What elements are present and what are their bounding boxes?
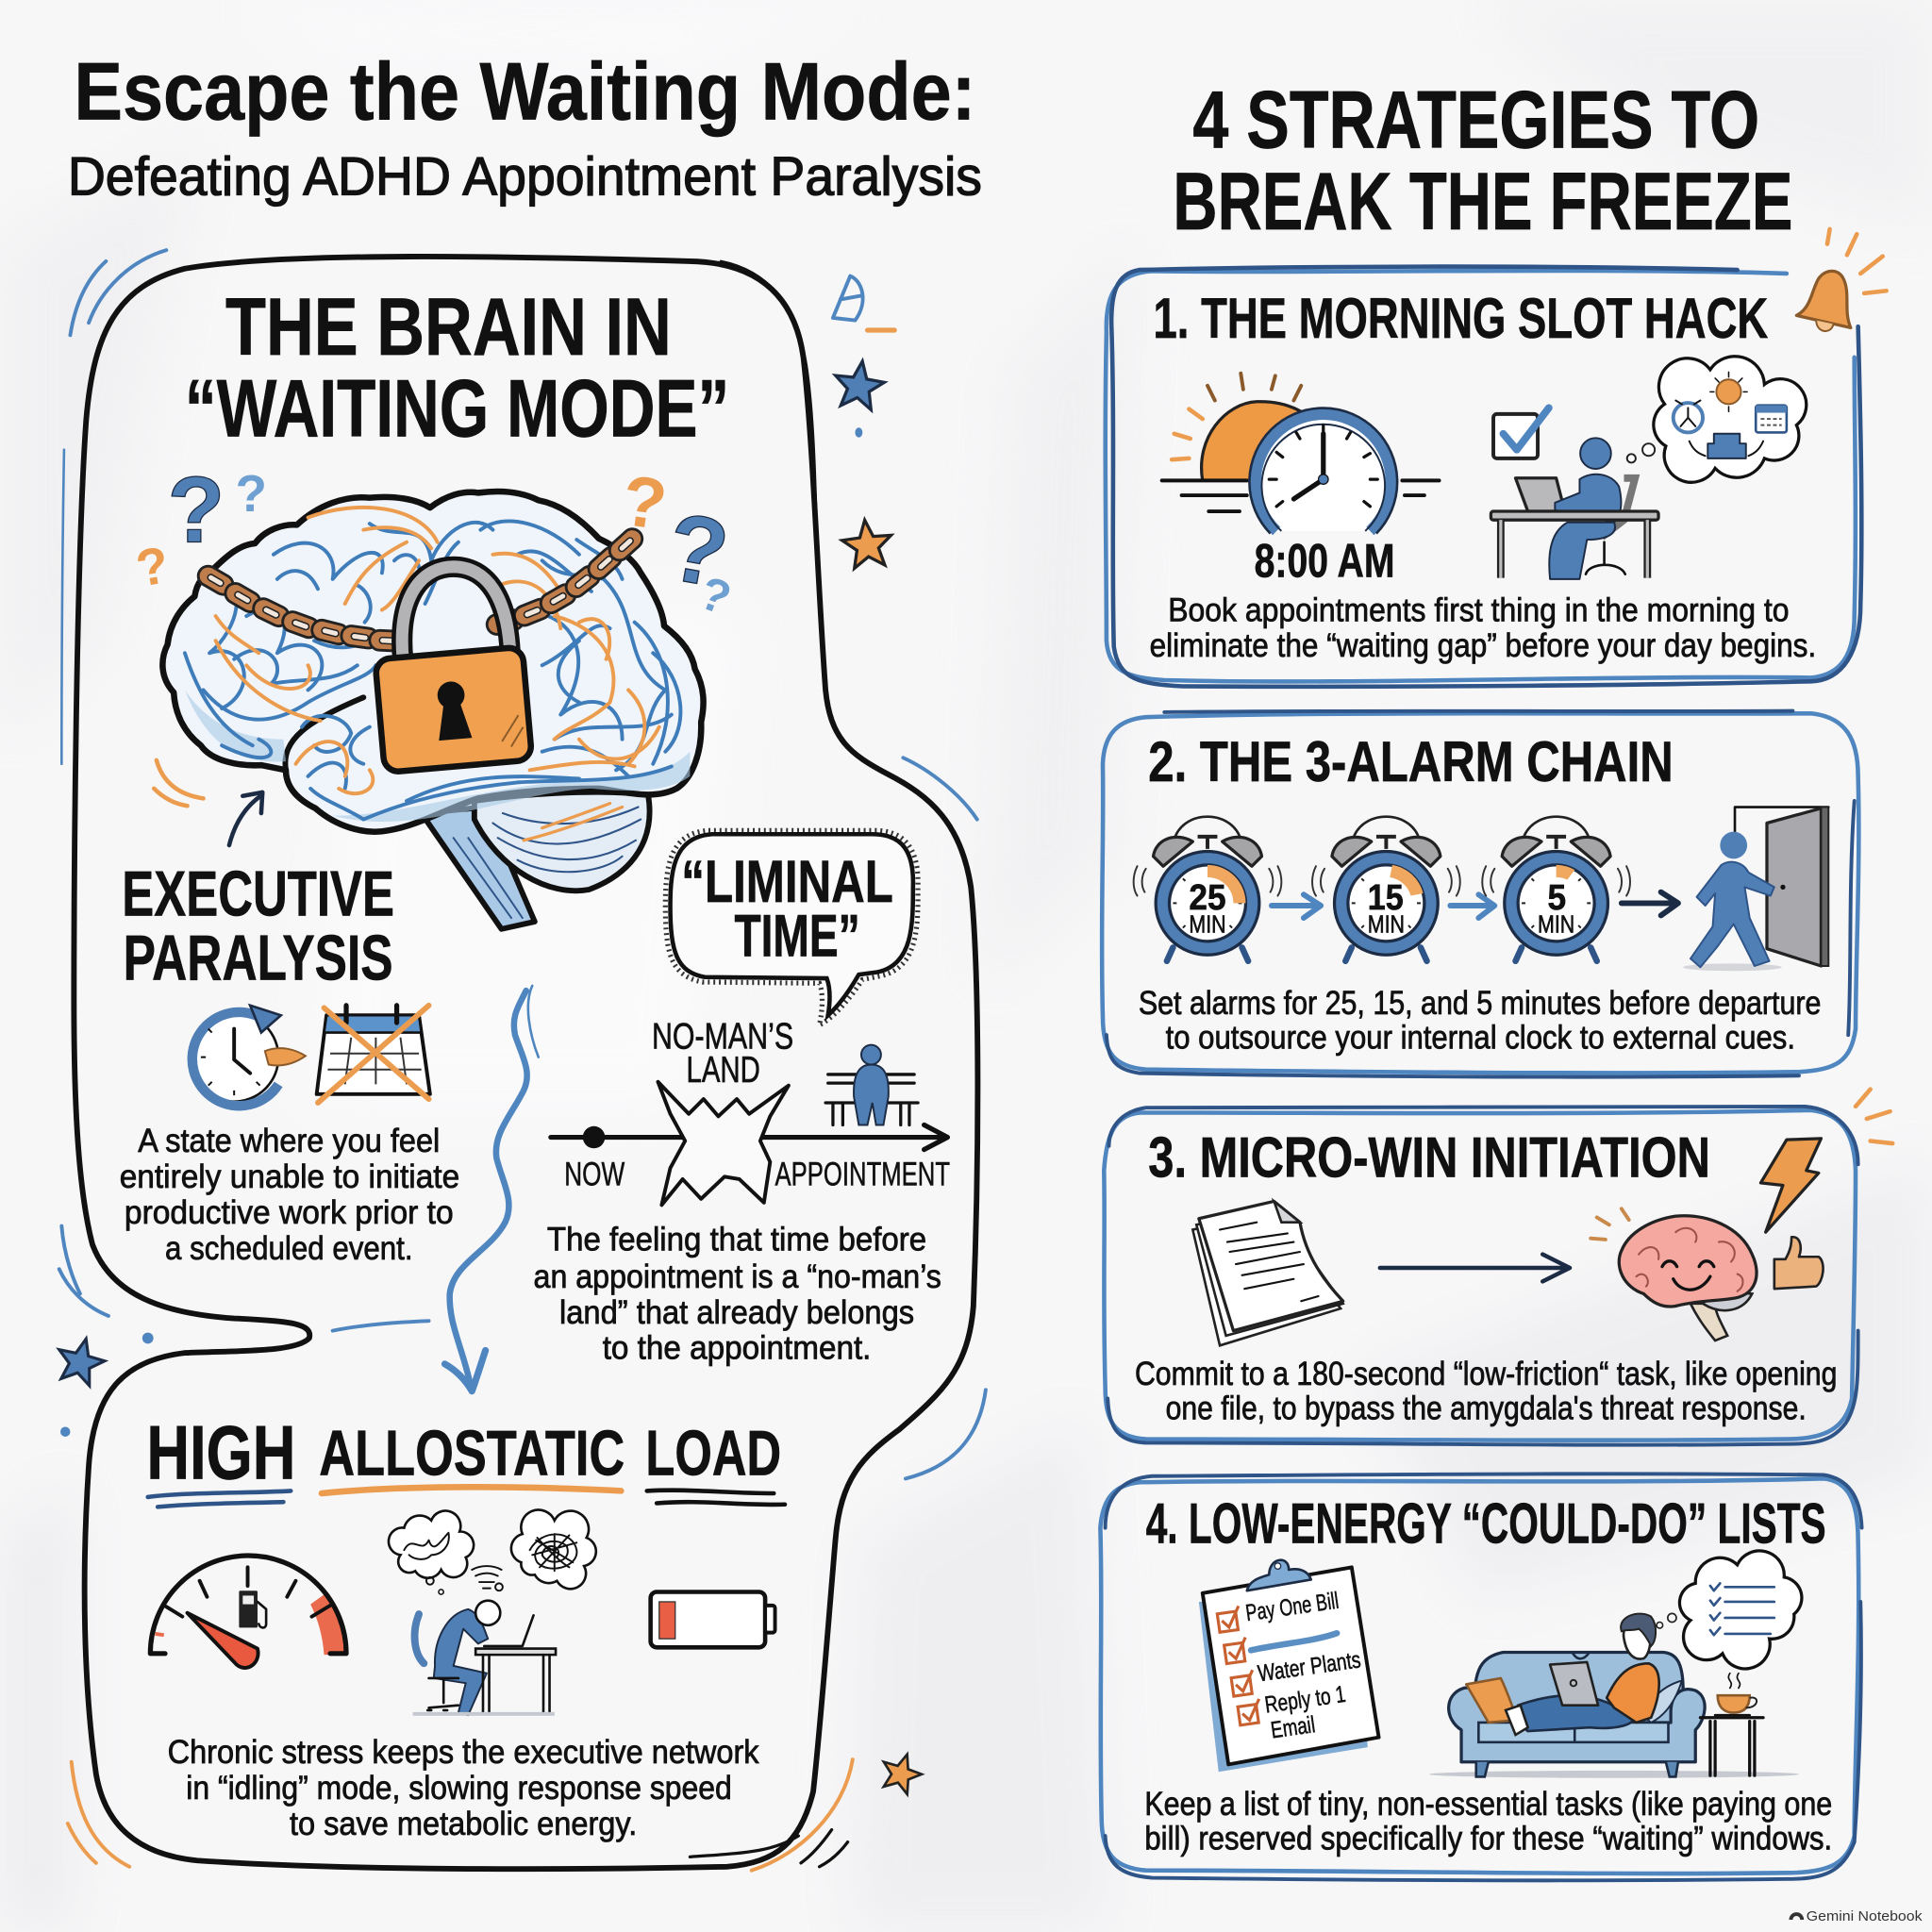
arrow (1380, 1255, 1570, 1281)
starburst (658, 1082, 789, 1205)
heading: high allostatic load: LOAD (645, 1418, 781, 1489)
card border (1100, 1478, 1858, 1874)
alarm clock 5 min (1482, 817, 1630, 961)
text: allostatic load description (168, 1734, 759, 1842)
text (1139, 985, 1821, 1057)
text (1135, 1356, 1837, 1427)
title: Defeating ADHD Appointment Paralysis (68, 146, 982, 207)
alarm clock 15 min: 15 (1368, 878, 1404, 918)
shackle (402, 567, 510, 659)
desk (475, 1649, 556, 1655)
heading: executive paralysis: EXECUTIVE (122, 858, 394, 929)
strategies heading (1173, 75, 1792, 247)
heading: executive paralysis: PARALYSIS (124, 923, 393, 993)
icon: person on bench (825, 1045, 918, 1124)
text: liminal time description (534, 1222, 941, 1367)
icon: document stack (1192, 1201, 1343, 1345)
icon: crossed out calendar (317, 1006, 430, 1103)
text: executive paralysis description (120, 1123, 459, 1267)
figure (415, 1614, 424, 1663)
question marks: ? (168, 458, 225, 563)
text: executive paralysis description: a scheduled event. (165, 1230, 413, 1267)
title: Escape the Waiting Mode: (74, 47, 975, 138)
thought clouds (389, 1511, 474, 1578)
icon: overwhelmed person at desk (389, 1510, 596, 1715)
heading: brain in waiting mode: “WAITING MODE” (185, 363, 729, 454)
text (1144, 1786, 1832, 1857)
icon: clipboard checklist (1199, 1560, 1379, 1772)
arrow (1622, 892, 1678, 915)
text: liminal time description: The feeling that time before (547, 1222, 926, 1258)
question marks: ? (693, 566, 738, 625)
question marks: ? (659, 492, 736, 608)
decorative sketch strokes (59, 250, 986, 1871)
panel: strategy 3 micro-win initiation (1104, 1090, 1892, 1445)
label: 8:00 AM: 8:00 AM (1255, 534, 1395, 587)
icon: clipboard checklist: Pay One Bill (1244, 1589, 1341, 1626)
blob outline (74, 257, 977, 1869)
text: liminal time description: to the appointment. (603, 1330, 871, 1367)
arrow (1450, 894, 1494, 918)
alarm clock 25 min (1134, 817, 1281, 961)
icon: melting clock (190, 1006, 306, 1106)
text: executive paralysis description: entirely unable to initiate (120, 1158, 459, 1195)
timeline: no-man's land: NOW (564, 1156, 625, 1192)
alarm clock 15 min (1312, 817, 1460, 961)
icon: clipboard checklist: Reply to 1 (1263, 1682, 1347, 1719)
text: executive paralysis description: A state where you feel (138, 1123, 440, 1159)
arrow (1272, 894, 1321, 918)
heading: 3. MICRO-WIN INITIATION (1148, 1125, 1710, 1189)
icon: fuel gauge (150, 1556, 347, 1668)
icon: clipboard checklist: Email (1269, 1712, 1317, 1743)
heading: brain in waiting mode: THE BRAIN IN (225, 282, 672, 373)
icon: clipboard checklist: Water Plants (1257, 1647, 1362, 1687)
alarm clock 25 min: MIN (1189, 910, 1226, 939)
heading: 2. THE 3-ALARM CHAIN (1148, 730, 1674, 793)
text: liminal time description: an appointment is a “no-man’s (534, 1258, 941, 1295)
icon: person on sofa with laptop (1429, 1551, 1802, 1778)
text: bill) reserved specifically for these “waiting” windows. (1144, 1820, 1832, 1857)
heading: executive paralysis (122, 858, 394, 993)
question marks: ? (617, 460, 672, 545)
watermark: Gemini Notebook (1807, 1908, 1923, 1924)
panel: strategy 2 three alarm chain (1102, 711, 1858, 1077)
text: eliminate the “waiting gap” before your day begins. (1150, 627, 1816, 664)
heading: high allostatic load: HIGH (146, 1410, 295, 1495)
text: Keep a list of tiny, non-essential tasks (like paying one (1144, 1786, 1832, 1823)
alarm clock 5 min: 5 (1547, 878, 1566, 918)
card border (1106, 271, 1856, 681)
chain right (485, 525, 646, 637)
question marks: ? (132, 535, 174, 598)
icon: person at desk with thought (1491, 357, 1807, 579)
brainstem (422, 808, 535, 929)
icon: side table and cup (1700, 1674, 1763, 1775)
illustration: brain with chain and padlock (154, 491, 704, 929)
motion and pointer (154, 760, 204, 806)
text: executive paralysis description: productive work prior to (125, 1194, 454, 1231)
icon: bell (1796, 229, 1887, 331)
text: Commit to a 180-second “low-friction“ task, like opening (1135, 1356, 1837, 1392)
text: allostatic load description: to save metabolic energy. (290, 1806, 637, 1842)
chain left (194, 562, 408, 652)
icon: low battery (651, 1592, 775, 1647)
text: to outsource your internal clock to external cues. (1166, 1020, 1795, 1057)
text (1150, 591, 1816, 664)
alarm clock 5 min: MIN (1538, 910, 1574, 939)
callout: liminal time speech bubble: TIME” (734, 904, 860, 970)
panel: strategy 4 low-energy could-do lists (1100, 1474, 1862, 1880)
text: liminal time description: land” that already belongs (559, 1294, 914, 1331)
heading: high allostatic load: ALLOSTATIC (319, 1418, 625, 1489)
icon: happy brain with thumb (1591, 1208, 1824, 1341)
icon: lightning bolt (1760, 1090, 1892, 1232)
stars (53, 358, 926, 1796)
panel: strategy 1 morning slot hack (1106, 229, 1887, 687)
cerebrum (162, 491, 704, 832)
timeline: no-man's land (551, 1017, 950, 1205)
panel: left blob (53, 250, 986, 1871)
callout: liminal time speech bubble: “LIMINAL (681, 849, 893, 915)
question marks (132, 458, 738, 625)
heading: high allostatic load (146, 1410, 785, 1507)
text: one file, to bypass the amygdala's threat response. (1166, 1391, 1807, 1427)
padlock body (375, 647, 532, 773)
timeline: no-man's land: NO-MAN’S (652, 1017, 793, 1058)
text: allostatic load description: in “idling” mode, slowing response speed (186, 1770, 732, 1807)
strategies heading: 4 STRATEGIES TO (1192, 75, 1759, 166)
shading (185, 690, 690, 822)
text: Set alarms for 25, 15, and 5 minutes before departure (1139, 985, 1821, 1022)
card border (1104, 1110, 1856, 1441)
timeline: no-man's land: LAND (687, 1050, 760, 1091)
arrow: wavy connector (445, 991, 527, 1391)
cerebellum (475, 792, 650, 891)
alarm clock 15 min: MIN (1368, 910, 1405, 939)
timeline: no-man's land: APPOINTMENT (775, 1156, 950, 1192)
icon: sunrise clock (1162, 374, 1440, 534)
text: Book appointments first thing in the morning to (1168, 591, 1789, 628)
heading: brain in waiting mode (185, 282, 729, 454)
callout: liminal time speech bubble (665, 830, 918, 1025)
card border (1102, 713, 1858, 1073)
icon: person walking through door (1683, 808, 1828, 971)
title (68, 47, 982, 207)
blue folds (185, 521, 680, 820)
question marks: ? (235, 464, 267, 523)
alarm clock 25 min: 25 (1189, 878, 1226, 918)
text: allostatic load description: Chronic stress keeps the executive network (168, 1734, 759, 1771)
